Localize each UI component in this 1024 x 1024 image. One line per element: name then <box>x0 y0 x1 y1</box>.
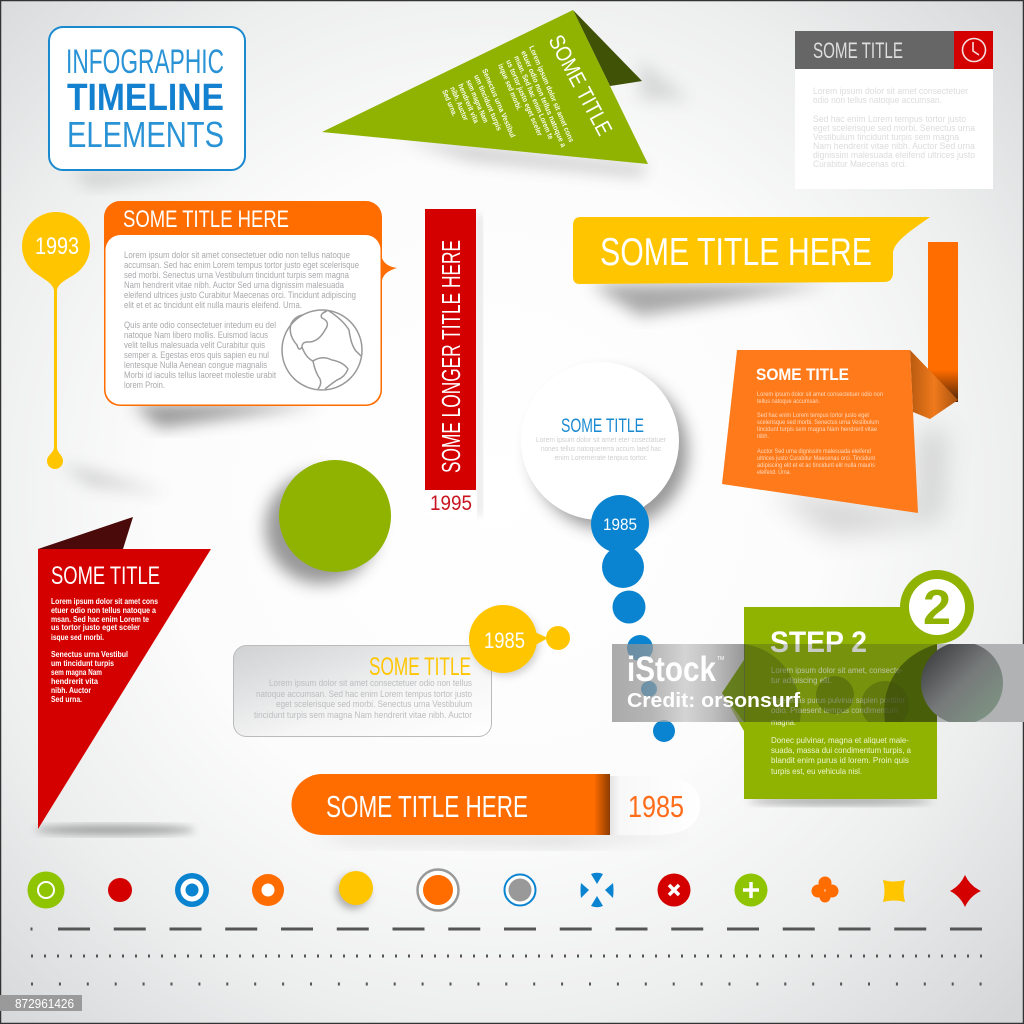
panel: orange folded ribbon sheet: scelerisque sed morbi. Senectus urna Vestibulum <box>757 419 879 426</box>
panel: grey header card with clock: Vestibulum tincidunt turpis sem magna <box>813 132 959 142</box>
panel: green step card: odio. Praesent tempus condimentum <box>771 705 898 715</box>
green circle <box>279 460 391 572</box>
yellow title banner: SOME TITLE HERE <box>600 231 872 274</box>
orange pill title with year tab: SOME TITLE HERE <box>326 789 528 824</box>
panel: red folded triangle: etuer odio non tellus natoque a <box>51 606 157 615</box>
panel: green folded triangle: isque sed morbi. <box>496 62 524 112</box>
panel: orange speech box: lorem Proin. <box>124 380 165 390</box>
icon: globe <box>282 310 362 390</box>
icon row <box>28 870 981 910</box>
panel: grey header card with clock: eget scelerisque sed morbi. Senectus urna <box>813 123 975 133</box>
panel: orange speech box: Morbi id iaculis tellus laoreet molestie urabit <box>124 370 276 380</box>
panel: red folded triangle: sem magna Nam <box>51 668 102 677</box>
icon: grey dot in blue ring <box>504 874 536 906</box>
panel: green step card: tur adipiscing elit. <box>771 675 832 685</box>
yellow timeline pin 1993 <box>22 212 90 469</box>
watermark band: iStock <box>627 650 716 689</box>
panel: orange folded ribbon sheet: adipiscing elit et et ac tincidunt elit nulla mauris <box>757 462 876 469</box>
icon: orange ring <box>252 874 284 906</box>
panel: red folded triangle: hendrerit vita <box>51 677 99 686</box>
yellow year bubble 1985: 1985 <box>484 628 525 653</box>
panel: orange speech box <box>104 201 397 406</box>
soft drop shadows <box>35 60 945 846</box>
icon: clock <box>954 31 993 69</box>
panel: red folded triangle <box>38 517 211 829</box>
panel: green step card: 2 <box>923 581 951 635</box>
panel: orange speech box: elit et et ac tincidunt elit nulla mauris eleifend. Urna. <box>124 300 302 310</box>
panel: orange folded ribbon sheet: Auctor Sed urna dignissim malesuada eleifend <box>757 448 871 455</box>
panel: orange folded ribbon sheet: tellus natoque accumsan. <box>757 398 820 405</box>
panel: green folded triangle: etuer odio non tellus natoque a <box>519 49 568 149</box>
panel: grey rounded card with yellow year <box>234 605 570 736</box>
panel: grey rounded card with yellow year: tincidunt turpis sem magna Nam hendrerit vitae nibh. Auctor <box>254 710 472 720</box>
panel: green folded triangle: um tincidunt turpis <box>472 73 504 132</box>
panel: orange speech box: accumsan. Sed hac enim Lorem tempus tortor justo eget scelerisque <box>124 260 359 270</box>
icon: green ring <box>28 872 64 908</box>
panel: orange folded ribbon sheet: Lorem ipsum dolor sit amet consectetuer odio non <box>757 391 883 398</box>
icon: red dot <box>108 878 132 902</box>
yellow timeline pin 1993: 1993 <box>35 233 79 260</box>
panel: grey header card with clock: dignissim malesuada eleifend ultrices justo <box>813 150 975 160</box>
panel: red folded triangle: nibh. Auctor <box>51 686 91 695</box>
panel: orange speech box: natoque Nam libero mollis. Euismod lacus <box>124 330 268 340</box>
dashed and dotted timeline lines <box>30 929 983 984</box>
panel: green folded triangle: nibh. Auctor <box>448 85 471 122</box>
panel: green folded triangle: msan. Sed hac enim Lorem te <box>512 54 556 141</box>
panel: green step card: Lorem ipsum dolor sit amet, consecte- <box>771 665 903 675</box>
panel: red folded triangle: um tincidunt turpis <box>51 659 115 668</box>
panel: orange folded ribbon sheet: ultrices justo Curabitur Maecenas orci. Tincidunt <box>757 455 875 462</box>
icon: orange dot in grey ring <box>418 870 458 910</box>
panel: red folded triangle: us tortor justo eget sceler <box>51 623 140 632</box>
panel: white circle card: nones tellus natoquererra accum laed hac <box>541 444 661 453</box>
icon: yellow concave square <box>883 880 905 902</box>
title box <box>49 27 245 170</box>
panel: green folded triangle: sem magna Nam <box>464 78 491 124</box>
panel: red folded triangle: SOME TITLE <box>51 562 160 590</box>
panel: grey rounded card with yellow year: Lorem ipsum dolor sit amet consectetuer odio non tellus <box>269 678 472 688</box>
panel: orange folded ribbon sheet: tincidunt turpis sem magna Nam hendrerit vitae <box>757 426 877 433</box>
panel: green folded triangle: Senectus urna Vestibul <box>480 67 517 139</box>
blue timeline dots <box>591 495 675 742</box>
panel: orange folded ribbon sheet: SOME TITLE <box>756 365 849 384</box>
title box: TIMELINE <box>67 77 224 119</box>
panel: red folded triangle: msan. Sed hac enim Lorem te <box>51 615 150 624</box>
yellow year bubble 1985 <box>469 605 570 676</box>
panel: orange folded ribbon sheet: Sed hac enim Lorem tempus tortor justo eget <box>757 412 869 419</box>
panel: green step card: Maecenas purus pulvinar sapien porttitor <box>771 695 905 705</box>
icon: orange clover <box>812 876 838 902</box>
watermark band <box>612 644 1024 722</box>
watermark band: Credit: orsonsurf <box>627 690 800 712</box>
panel: green folded triangle: hendrerit vita <box>456 82 481 125</box>
panel: red folded triangle: Sed urna. <box>51 695 82 704</box>
icon: red cross button <box>658 874 690 906</box>
panel: red vertical ribbon with 1995: 1995 <box>430 492 472 515</box>
panel: orange folded ribbon sheet: eleifend. Urna. <box>757 469 791 476</box>
panel: grey header card with clock: Lorem ipsum dolor sit amet consectetuer <box>813 86 968 96</box>
panel: green step card: blandit enim purus id lorem. Proin quis <box>771 755 909 765</box>
panel: white circle card: SOME TITLE <box>561 416 644 437</box>
orange pill title with year tab: 1985 <box>628 789 684 824</box>
panel: orange speech box: lentesque Nulla Aenean congue magnalis <box>124 360 267 370</box>
panel: green folded triangle: Sed urna. <box>440 88 459 118</box>
yellow title banner <box>573 217 930 284</box>
panel: red vertical ribbon with 1995 <box>425 209 477 522</box>
title box: ELEMENTS <box>67 114 224 155</box>
panel: grey rounded card with yellow year: natoque accumsan. Sed hac enim Lorem tempus tortor justo <box>256 689 472 699</box>
panel: green step card: magna. <box>771 717 796 727</box>
panel: orange speech box: Nam hendrerit vitae nibh. Auctor Sed urna dignissim malesuada <box>124 280 344 290</box>
panel: green folded triangle: us tortor justo eget sceler <box>504 58 545 137</box>
panel: grey rounded card with yellow year: eget scelerisque sed morbi. Senectus urna Vestibulum <box>276 699 472 709</box>
panel: orange speech box: Lorem ipsum dolor sit amet consectetuer odio non tellus natoque <box>124 250 350 260</box>
panel: green folded triangle: SOME TITLE <box>544 31 617 139</box>
panel: red folded triangle: isque sed morbi. <box>51 633 104 642</box>
panel: orange speech box: sed morbi. Senectus urna Vestibulum tincidunt turpis sem magna <box>124 270 349 280</box>
panel: grey rounded card with yellow year: SOME TITLE <box>369 653 471 681</box>
panel: white circle card <box>521 362 679 520</box>
icon: blue cross-cut circle <box>580 873 614 907</box>
panel: orange speech box: eleifend ultrices justo Curabitur Maecenas orci. Tincidunt adipiscing <box>124 290 356 300</box>
panel: green step card: turpis est, eu vehicula nisl. <box>771 766 862 776</box>
watermark band: TM <box>717 656 724 662</box>
panel: grey header card with clock: odio non tellus natoque accumsan. <box>813 95 942 105</box>
panel: orange folded ribbon sheet: nibh. <box>757 433 769 440</box>
panel: red vertical ribbon with 1995: SOME LONGER TITLE HERE <box>436 240 466 473</box>
panel: orange speech box: velit tellus malesuada velit Curabitur quis <box>124 340 265 350</box>
panel: orange speech box: SOME TITLE HERE <box>123 206 289 233</box>
orange pill title with year tab <box>292 774 700 835</box>
panel: grey header card with clock <box>795 31 993 189</box>
panel: green folded triangle <box>322 10 648 164</box>
panel: orange speech box: semper a. Egestas eros quis sapien eu nul <box>124 350 269 360</box>
panel: green step card: Donec pulvinar, magna et aliquet male- <box>771 735 909 745</box>
panel: green folded triangle: Lorem ipsum dolor sit amet cons <box>527 44 576 144</box>
panel: grey header card with clock: Sed hac enim Lorem tempus tortor justo <box>813 114 966 124</box>
blue timeline dots: 1985 <box>603 515 637 534</box>
panel: green step card: suada, massa dui condimentum turpis, a <box>771 745 911 755</box>
panel: red folded triangle: Senectus urna Vestibul <box>51 650 128 659</box>
panel: green step card <box>722 570 974 799</box>
title box: INFOGRAPHIC <box>66 43 224 81</box>
panel: grey header card with clock: Nam hendrerit vitae nibh. Auctor Sed urna <box>813 141 975 151</box>
icon: blue target <box>175 873 209 907</box>
icon: yellow dot with shadow <box>336 871 373 909</box>
panel: grey header card with clock: SOME TITLE <box>813 38 903 63</box>
icon: red four-point star <box>950 875 981 907</box>
stock id tag: 872961426 <box>15 996 74 1011</box>
panel: orange folded ribbon sheet <box>722 242 958 513</box>
panel: white circle card: Lorem ipsum dolor sit amet eter cosectatuer <box>536 435 666 444</box>
panel: white circle card: enim Loremerate tenpus tortor. <box>554 453 648 462</box>
icon: green plus button <box>734 874 768 906</box>
panel: orange speech box: Quis ante odio consectetuer intedum eu del <box>124 320 276 330</box>
panel: green step card: STEP 2 <box>770 626 867 659</box>
panel: red folded triangle: Lorem ipsum dolor sit amet cons <box>51 597 159 606</box>
panel: grey header card with clock: Curabitur Maecenas orci. <box>813 159 907 169</box>
